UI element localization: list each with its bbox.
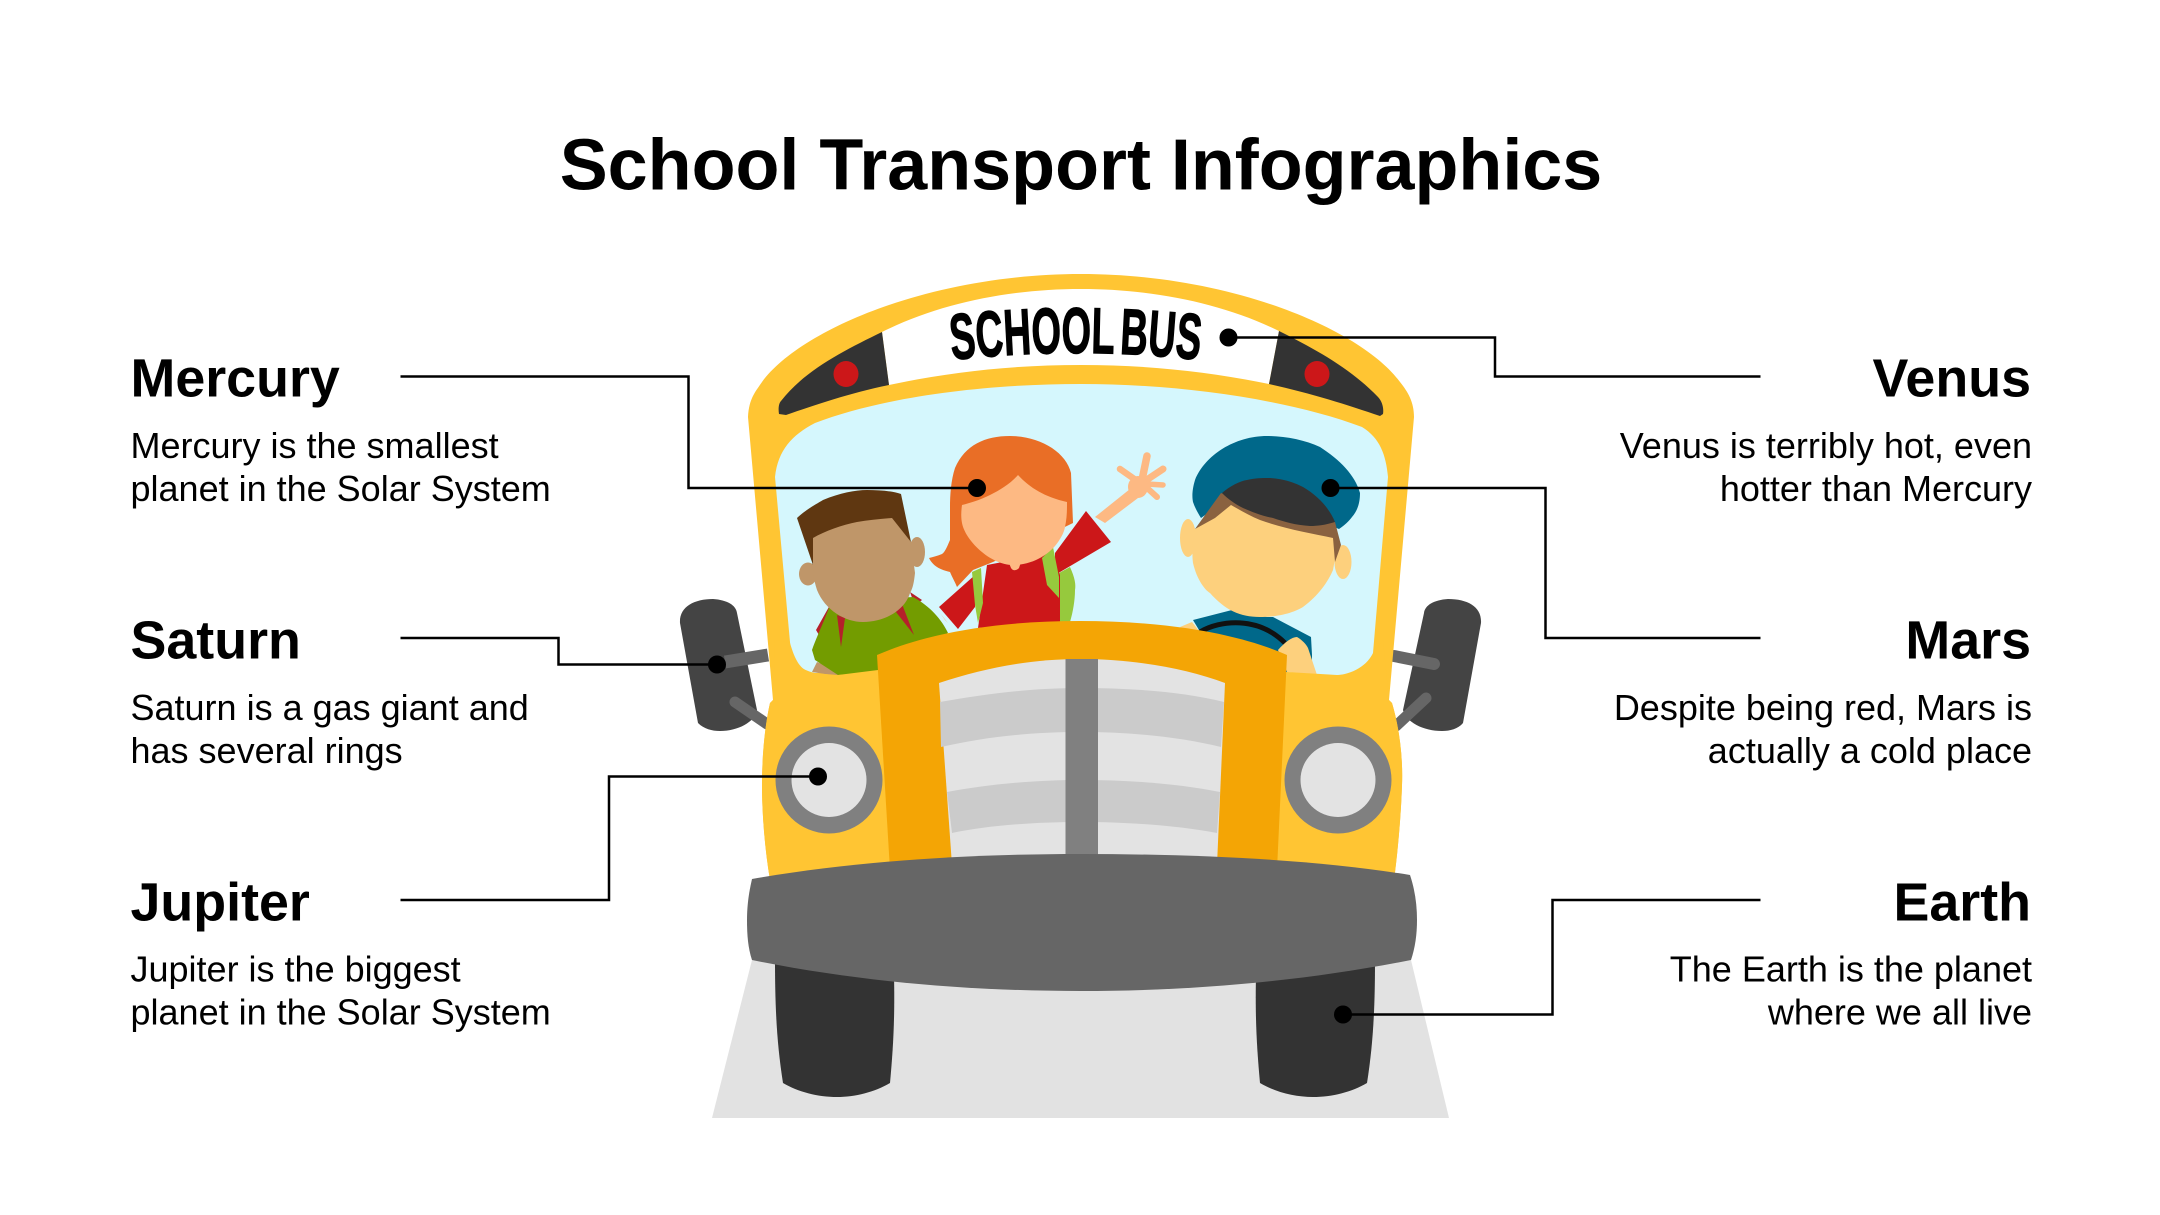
callout: Earth: Earth	[1893, 872, 2031, 932]
bus body	[748, 274, 1414, 880]
grille	[939, 659, 1225, 865]
callout: Saturn	[130, 610, 726, 771]
callout: Mars: actually a cold place	[1708, 730, 2032, 771]
callout: Mercury: planet in the Solar System	[130, 468, 551, 509]
bumper	[747, 854, 1417, 991]
sign lettering: SCHOOL BUS	[950, 307, 1202, 360]
callout: Saturn: has several rings	[130, 730, 403, 771]
callout: Mars	[1322, 479, 2032, 771]
callout: Jupiter: planet in the Solar System	[130, 992, 551, 1032]
callout: Jupiter: Jupiter	[130, 872, 310, 932]
illustration: school bus	[680, 274, 1482, 1118]
road	[712, 960, 1449, 1118]
callout: Earth: where we all live	[1767, 992, 2032, 1032]
callout: Jupiter	[130, 768, 827, 1032]
icon: left headlight	[776, 726, 882, 834]
callout: Mercury: Mercury	[130, 348, 340, 408]
callout: Venus: Venus is terribly hot, even	[1620, 425, 2032, 466]
icon: left mirror	[680, 599, 768, 731]
icon: right mirror	[1394, 599, 1481, 731]
warning light left	[779, 332, 889, 415]
warning light right	[1269, 331, 1383, 416]
bus lower body	[762, 640, 1402, 880]
child: boy	[797, 490, 948, 676]
callout: Mars: Despite being red, Mars is	[1614, 687, 2032, 728]
callout: Mars: Mars	[1905, 610, 2031, 670]
callout: Saturn: Saturn	[130, 610, 301, 670]
callout: Saturn: Saturn is a gas giant and	[130, 687, 529, 728]
callout: Venus	[1220, 328, 2032, 509]
hood	[877, 621, 1287, 870]
icon: right headlight	[1284, 726, 1392, 834]
child: girl waving	[929, 436, 1163, 629]
callout: Mercury: Mercury is the smallest	[130, 425, 499, 466]
windshield	[775, 384, 1388, 675]
callout: Venus: hotter than Mercury	[1720, 468, 2032, 509]
callout: Earth	[1334, 872, 2032, 1032]
callout: Venus: Venus	[1873, 348, 2031, 408]
driver	[1180, 436, 1360, 675]
callout: Jupiter: Jupiter is the biggest	[130, 948, 461, 990]
callout: Earth: The Earth is the planet	[1670, 948, 2032, 990]
wheels	[775, 960, 1375, 1097]
sign panel	[882, 289, 1279, 385]
title: School Transport Infographics	[560, 126, 1602, 206]
callout: Mercury	[130, 348, 986, 509]
